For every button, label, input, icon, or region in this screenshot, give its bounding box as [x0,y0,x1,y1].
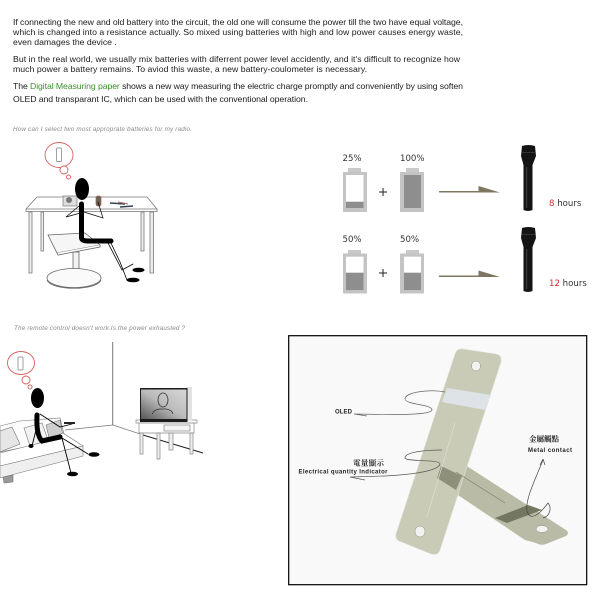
main strip [396,349,501,554]
radio and parts on desk [63,196,133,207]
thought bubble with battery [45,142,73,179]
thought bubble with battery [8,352,34,389]
trace on second strip [456,472,505,503]
metal contact callout: 金屬觸點 [529,434,559,444]
paragraph 1: which is changed into a resistance actually. So mixed using batteries with high and low power causes energy waste, [12,27,463,37]
arrow [439,186,500,192]
caption: radio scene: How can I select two most approprate batteries for my radio. [13,126,192,133]
OLED callout [335,391,445,416]
OLED callout: OLED [335,410,353,416]
overlap band [437,466,462,490]
row 1: 25% + 100% gives 8 hours [342,145,582,212]
label 8 hours: 8 hours [549,199,582,209]
flashlight [521,145,536,211]
paragraph 1: If connecting the new and old battery into the circuit, the old one will consume the power till the two have equal voltage, [13,17,463,27]
label 50% right: 50% [400,235,419,245]
OLED white band [442,388,491,410]
second strip [440,460,568,545]
indicator callout: Electrical quantity Indicator [298,470,388,476]
illustration: person at desk [26,142,157,288]
stick figure [66,178,144,282]
paragraph 1: even damages the device . [13,37,117,47]
row 2: 50% + 50% gives 12 hours [342,227,587,294]
stick figure with remote [28,388,100,476]
plus sign [379,269,387,277]
desk [26,197,157,273]
indicator callout: 電量顯示 [353,458,385,468]
screw holes [415,361,548,537]
paragraph 1 [12,17,463,47]
TV stand [136,420,197,459]
paragraph 2 [13,54,461,74]
photo panel: digital measuring paper [289,336,587,585]
photo background and frame [289,336,587,585]
plus sign [379,188,387,196]
paragraph 3: OLED and transparant IC, which can be used with the conventional operation. [13,94,308,104]
indicator callout [298,450,442,480]
label 12 hours: 12 hours [549,279,587,289]
battery 100% [400,168,424,212]
arrow [439,270,500,277]
sofa [0,418,83,483]
label 25%: 25% [342,154,362,164]
paragraph 2: But in the real world, we usually mix batteries with diferrent power level accidently, and it's difficult to recognize how [13,54,461,64]
metal contact callout: Metal contact [528,448,572,454]
dark contact band on second strip [495,505,542,523]
TV with face on screen [140,387,192,422]
illustration: person on sofa watching TV [0,342,203,483]
label 100%: 100% [400,154,425,164]
battery combinations chart [342,145,587,294]
paragraph 2: much power a battery remains. To aviod this waste, a new battery-coulometer is necessary. [13,64,367,74]
battery 50% left [343,250,367,294]
flashlight [521,227,536,292]
battery 25% [343,168,367,212]
chair [47,233,101,288]
paragraph 3: The Digital Measuring paper shows a new way measuring the electric charge promptly and conveniently by using soften [13,81,463,91]
caption: remote control scene: The remote control doesn't work.Is the power exhausted ? [14,325,185,332]
thin traces [427,423,455,517]
label 50% left: 50% [342,235,362,245]
room lines [65,342,203,453]
paragraph 3 [13,81,463,104]
intro text block [12,17,463,104]
battery 50% right [400,250,424,294]
metal contact callout [527,434,572,518]
